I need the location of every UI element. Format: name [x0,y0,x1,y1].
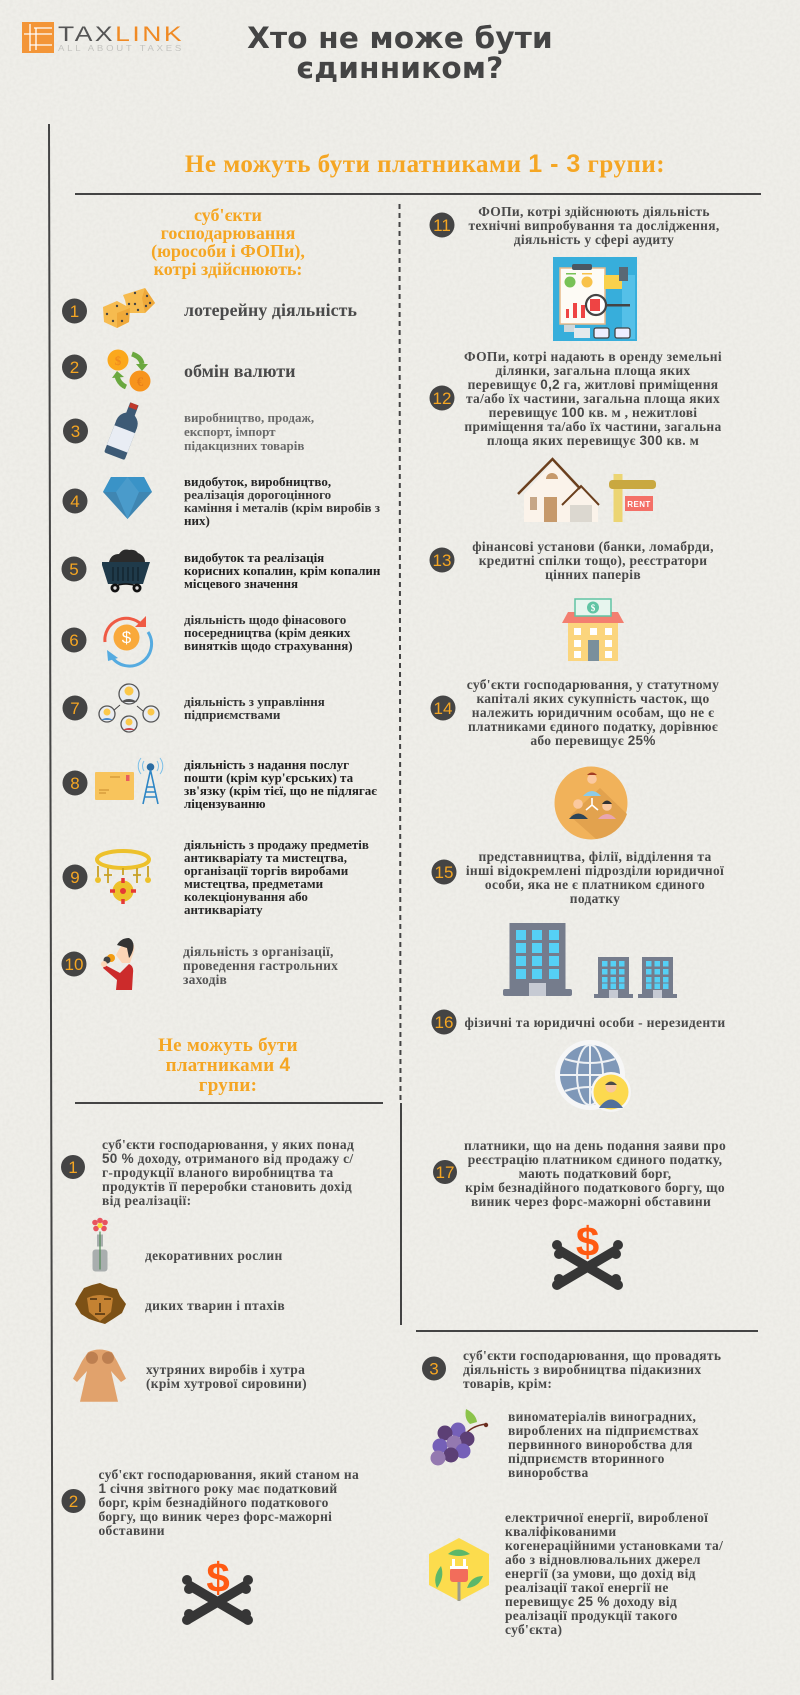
item 3: експорт, імпорт [184,424,276,439]
logo: TaxLink [22,22,184,53]
text: electric energy: або з відновлювальних джерел [505,1552,701,1567]
item 9: організації торгів виробами [184,863,349,878]
item 14: капіталі яких сукупність часток, що [476,691,710,706]
item 17: реєстрацію платником єдиного податку, [468,1152,722,1167]
icon: house for rent [518,459,656,522]
group 4 item 3: діяльність з виробництва підакизних [463,1362,701,1377]
group 4 item 3 [422,1348,721,1391]
item 1 [62,288,357,328]
text: wine materials [508,1409,699,1480]
item 3: 3 [71,422,80,441]
item 11: ФОПи, котрі здійснюють діяльність [478,204,710,219]
item 14: або перевищує 25% [530,733,656,748]
item 1: 1 [70,302,79,321]
item 6: посередництва (крім деяких [184,625,351,640]
item 11: діяльність у сфері аудиту [514,232,674,247]
item 14: суб'єкти господарювання, у статутному [467,677,719,692]
item 9: антикваріату [184,902,263,917]
text: wine materials: виноматеріалів виноградних, [508,1409,696,1424]
item 6 [62,612,353,666]
item 12: та/або їх частини, загальна площа яких [466,391,720,406]
icon: audit [553,257,637,341]
title: єдинником? [297,51,503,85]
group 4 item 2: боргу, що виник через форс-мажорні [98,1509,332,1524]
item 14 [430,677,719,748]
item 13: 13 [433,551,451,570]
subheading: (юрособи і ФОПи), [151,241,305,262]
item 9: 9 [70,868,80,887]
item 5: 5 [69,560,79,579]
icon: grapes [430,1409,488,1466]
heading rule [75,193,761,195]
icon: green energy [429,1538,489,1601]
icon: bank building [562,599,624,661]
text: fur goods: (крім хутрової сировини) [146,1376,307,1391]
text: electric energy: реалізації такої енергії не [505,1580,669,1595]
subheading: котрі здійснюють: [154,259,302,279]
item 12: площа яких перевищує 300 кв. м [487,433,699,448]
group 4 item 2 [62,1467,359,1538]
item 16 [432,1010,725,1034]
group 4 item 3: товарів, крім: [463,1376,552,1391]
item 11 [430,204,720,247]
heading: group 4 [158,1035,298,1096]
item 13: цінних паперів [545,567,641,582]
item 4: видобуток, виробництво, [184,474,331,489]
item 7: 7 [70,699,80,718]
group 4 item 3: 3 [429,1360,439,1378]
item 5: видобуток та реалізація [184,550,324,565]
item 2: 2 [70,358,79,377]
heading: group 4: Не можуть бути [158,1035,298,1056]
item 10 [62,938,338,990]
item 8: зв'язку (крім тієї, що не підлягає [184,783,377,798]
item 6: діяльність щодо фінасового [184,612,346,627]
icon: tax debt crossbones [182,1554,253,1625]
icon: diamond [103,477,152,519]
item 17: крім безнадійного податкового боргу, що [465,1180,725,1195]
item 6: 6 [69,631,79,650]
icon: lion [75,1283,126,1324]
text: electric energy: реалізації продукції такого [505,1608,678,1623]
heading: group 4: групи: [199,1075,257,1096]
icon: tax debt crossbones: $ [576,1218,599,1265]
item 13: фінансові установи (банки, ломабрди, [472,539,714,554]
icon: flower vase [92,1218,108,1272]
item 7: діяльність з управління [184,694,325,709]
text: fur goods [146,1362,307,1391]
group 4 item 1: продуктів її переробки становить дохід [102,1179,352,1194]
item 9: мистецтва, предметами [184,876,324,891]
item 4: 4 [70,492,80,511]
item 1: лотерейну діяльність [184,300,357,320]
text: wine materials: підприємств вторинного [508,1451,665,1466]
item 14: платниками єдиного податку, дорівнює [468,719,718,734]
text: electric energy: енергії (за умови, що дохід від [505,1566,696,1581]
group 4 item 2: 2 [69,1492,78,1511]
group 4 item 2: борг, крім безнадійного податкового [98,1495,329,1510]
item 15: представництва, філії, відділення та [478,849,712,864]
text: wine materials: вироблених на підприємствах [508,1423,699,1438]
subheading: суб'єкти [194,205,262,225]
group 4 item 2: обставини [98,1523,165,1538]
item 12: 12 [433,389,451,408]
icon: currency exchange: $ [115,353,122,368]
item 14: 14 [434,699,452,718]
icon: money cycle [105,616,152,666]
group 4 item 1 [61,1137,354,1208]
icon: dice [103,288,155,328]
item 10: заходів [183,972,227,987]
item 15: 15 [435,863,453,882]
item 16: фізичні та юридичні особи - нерезиденти [465,1015,725,1030]
item 12: перевищує 0,2 га, житлові приміщення [468,377,718,392]
text: electric energy: суб'єкта) [505,1622,562,1637]
group 4 item 2: суб'єкт господарювання, який станом на [98,1467,359,1482]
text: electric energy: електричної енергії, виробленої [505,1510,708,1525]
text: fur goods: хутряних виробів і хутра [146,1362,305,1377]
text: electric energy [505,1510,723,1637]
icon: fur coat [73,1350,126,1402]
group 4 item 3: суб'єкти господарювання, що провадять [463,1348,721,1363]
group 4 item 1: від реалізації: [102,1193,191,1208]
item 16: 16 [435,1013,453,1032]
item 3 [63,400,314,460]
icon: envelope and tower [95,758,163,804]
item 5 [62,550,381,592]
item 2 [62,350,295,392]
icon: antique necklace [95,851,151,904]
item 15: інші відокремлені підрозділи юридичної [466,863,724,878]
item 3: виробництво, продаж, [184,410,314,425]
item 4: них) [184,513,210,528]
item 10: діяльність з організації, [183,944,334,959]
heading: group 4: платниками 4 [166,1055,291,1076]
item 3: підакцизних товарів [184,438,304,453]
item 12 [430,349,722,448]
item 12: ділянки, загальна площа яких [496,363,690,378]
group 4 item 1: 1 [68,1158,78,1177]
item 4: реалізація дорогоцінного [184,487,331,502]
item 8: пошти (крім кур'єрських) та [184,770,354,785]
item 13: кредитні спілки тощо), реєстратори [479,553,707,568]
item 6: винятків щодо страхування) [184,638,353,653]
item 9: діяльність з продажу предметів [184,837,369,852]
item 9: антикваріату та мистецтва, [184,850,347,865]
item 17: мають податковий борг, [519,1166,671,1181]
item 8: ліцензуванню [184,796,266,811]
item 7: підприємствами [184,707,281,722]
title [247,21,553,85]
icon: mine cart [102,550,150,592]
item 9 [62,837,369,917]
icon: currency exchange [108,350,150,392]
item 12: ФОПи, котрі надають в оренду земельні [464,349,722,364]
dashed column divider [400,204,401,1103]
icon: wine bottle [104,400,145,460]
logo: TaxLink: ALL ABOUT TAXES [58,44,184,53]
item 9: колекціонування або [184,889,308,904]
icon: tax debt crossbones: $ [206,1554,230,1601]
text: wine materials: виноробства [508,1465,589,1480]
item 17 [433,1138,726,1209]
item 10: проведення гастрольних [183,958,338,973]
item 8 [62,757,377,811]
item 11: технічні випробування та дослідження, [468,218,720,233]
title: Хто не може бути [247,21,553,55]
item 17: виник через форс-мажорні обставини [471,1194,711,1209]
group 4 item 1: г-продукції вланого виробництва та [102,1165,333,1180]
item 7 [62,684,325,732]
item 11: 11 [433,216,451,235]
group 4 item 1: суб'єкти господарювання, у яких понад [102,1137,354,1152]
item 14: належить юридичним особам, що не є [472,705,714,720]
heading: groups 1-3: Не можуть бути платниками 1 - 3 групи: [185,150,665,178]
group 4 rule [75,1102,383,1104]
lower right rule [416,1330,758,1332]
item 17: платники, що на день подання заяви про [464,1138,726,1153]
item 17: 17 [436,1163,454,1182]
icon: bank building: $ [591,603,596,613]
item 8: 8 [70,774,80,793]
icon: singer [101,938,134,990]
text: electric energy: кваліфікованими [505,1524,616,1539]
icon: management network [99,684,159,732]
text: wine materials: первинного виноробства для [508,1437,693,1452]
icon: shareholders [554,766,628,840]
icon: money cycle: $ [122,628,132,647]
item 13 [430,539,714,582]
group 4 item 1: 50 % доходу, отриманого від продажу с/ [102,1151,353,1166]
item 2: обмін валюти [184,361,295,381]
subheading [151,205,305,279]
left vertical rule [49,124,52,1680]
subheading: господарювання [161,223,296,243]
item 8: діяльність з надання послуг [184,757,349,772]
icon: house for rent: RENT [627,500,651,509]
item 4 [62,474,380,528]
logo: TaxLink: TAX LINK [58,23,184,46]
item 10: 10 [65,955,83,974]
text: decorative plants: декоративних рослин [145,1248,283,1263]
icon: globe with person [555,1040,631,1112]
icon: tax debt crossbones [552,1218,623,1290]
text: electric energy: перевищує 25 % доходу від [505,1594,677,1609]
item 4: каміння і металів (крім виробів з [184,500,380,515]
solid column divider [400,1103,402,1325]
text: wild animals: диких тварин і птахів [145,1298,285,1313]
item 5: корисних копалин, крім копалин [184,563,381,578]
item 15 [432,849,724,906]
item 15: податку [570,891,620,906]
icon: office buildings [503,923,677,998]
item 12: перевищує 100 кв. м , нежитлові [489,405,697,420]
item 12: приміщення та/або їх частини, загальна [464,419,722,434]
icon: currency exchange: € [137,374,144,389]
text: electric energy: когенераційними установками та/ [505,1538,723,1553]
item 15: особи, яка не є платником єдиного [485,877,705,892]
group 4 item 2: 1 січня звітного року має податковий [98,1481,337,1496]
item 5: місцевого значення [184,576,298,591]
